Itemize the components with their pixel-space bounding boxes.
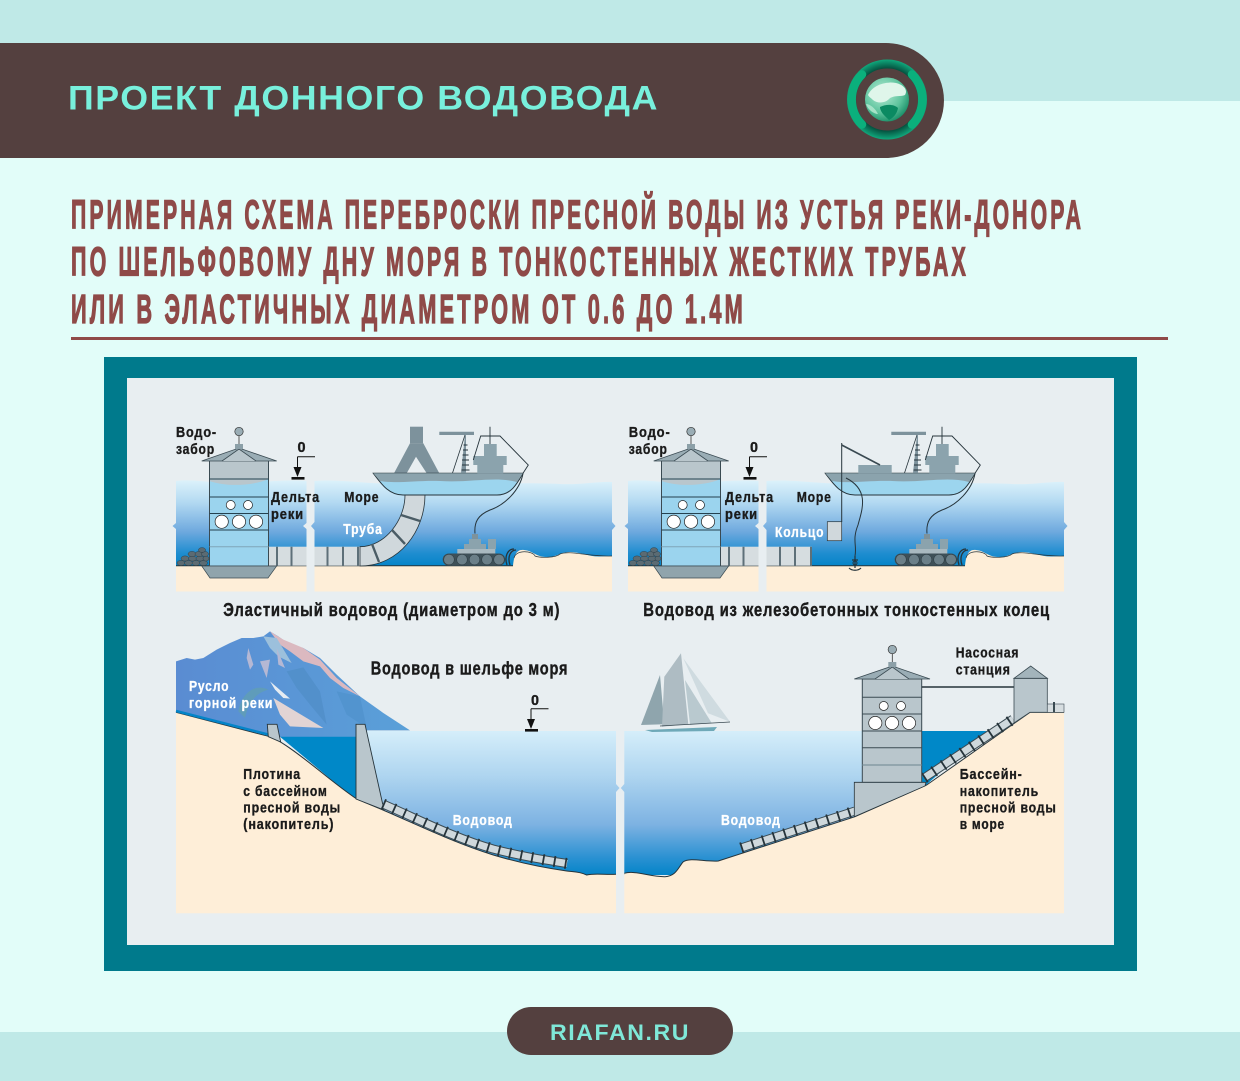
seabed pipeline xyxy=(383,804,567,864)
diagram panel background xyxy=(127,378,1114,945)
icon: globe logo xyxy=(852,64,922,135)
labels: 0 xyxy=(298,439,306,456)
header bar xyxy=(0,43,944,158)
header title: ПРОЕКТ ДОННОГО ВОДОВОДА xyxy=(68,80,659,118)
water: sea xyxy=(763,481,1068,566)
labels: пресной воды xyxy=(243,800,341,817)
labels: Труба xyxy=(343,521,383,538)
labels xyxy=(721,644,1057,833)
sea water xyxy=(365,731,620,875)
seabed sand xyxy=(176,566,612,592)
caption: Эластичный водовод (диаметром до 3 м) xyxy=(223,600,560,620)
pipeline lower xyxy=(741,811,855,848)
main heading xyxy=(71,192,1084,332)
mountain xyxy=(176,631,410,737)
panel: shelf pipeline right xyxy=(621,644,1064,913)
seabed sand xyxy=(628,566,1064,592)
labels: Море xyxy=(344,489,379,506)
ring sections xyxy=(720,547,812,566)
bottom band xyxy=(0,1032,1240,1081)
pump station xyxy=(922,666,1064,723)
labels: Насосная xyxy=(956,644,1019,661)
panel: elastic pipeline xyxy=(172,424,616,620)
zero level mark xyxy=(292,457,315,480)
pipeline upper xyxy=(924,719,1013,778)
labels: с бассейном xyxy=(243,783,328,800)
labels: реки xyxy=(725,506,758,523)
water: sea xyxy=(311,481,616,566)
water: river delta xyxy=(172,480,306,566)
shelf sand xyxy=(624,712,1064,913)
panel: concrete ring pipeline xyxy=(624,424,1068,620)
labels: Водо- xyxy=(629,424,671,441)
ship with crane xyxy=(825,427,980,570)
labels: реки xyxy=(271,506,304,523)
underwater crawler xyxy=(443,474,523,566)
labels: станция xyxy=(956,661,1011,678)
shelf sand xyxy=(176,712,616,913)
freshwater basin xyxy=(921,731,987,786)
pipe sections xyxy=(268,495,425,566)
labels: 0 xyxy=(531,692,540,709)
zero level mark xyxy=(744,457,767,480)
underwater crawler xyxy=(895,474,975,566)
big dam xyxy=(356,724,384,810)
caption: Водовод из железобетонных тонкостенных колец xyxy=(643,600,1050,620)
labels: в море xyxy=(960,816,1005,833)
zero level mark xyxy=(525,709,548,732)
labels: Водовод xyxy=(453,812,513,829)
intake tower right xyxy=(629,427,729,578)
footer pill xyxy=(507,1007,733,1055)
labels: Кольцо xyxy=(775,524,824,541)
labels: забор xyxy=(629,441,668,458)
labels: Море xyxy=(797,489,832,506)
labels: Водовод в шельфе моря xyxy=(371,658,568,678)
offshore tower xyxy=(854,645,930,817)
small dam xyxy=(267,724,281,742)
labels: Дельта xyxy=(725,489,774,506)
labels: забор xyxy=(176,441,215,458)
sea water xyxy=(621,731,865,875)
intake tower left xyxy=(177,427,277,578)
labels: Бассейн- xyxy=(960,766,1023,783)
labels xyxy=(176,424,383,538)
labels: пресной воды xyxy=(960,800,1057,817)
labels: Водо- xyxy=(176,424,217,441)
labels: горной реки xyxy=(189,695,273,712)
water: river delta xyxy=(624,480,758,566)
diagram frame xyxy=(104,357,1137,971)
sailing yacht xyxy=(641,653,730,732)
top band xyxy=(0,0,1240,101)
ship with A-frame xyxy=(373,427,528,495)
labels: (накопитель) xyxy=(243,816,334,833)
panel: shelf pipeline left xyxy=(176,631,620,913)
labels: накопитель xyxy=(960,783,1039,800)
labels: Русло xyxy=(189,678,229,695)
labels xyxy=(189,658,568,833)
labels: Плотина xyxy=(243,766,301,783)
labels: Дельта xyxy=(271,489,320,506)
freshwater reservoir xyxy=(280,737,357,800)
labels xyxy=(629,424,832,541)
labels: Водовод xyxy=(721,812,781,829)
labels: 0 xyxy=(750,439,759,456)
footer site name: RIAFAN.RU xyxy=(550,1020,690,1045)
